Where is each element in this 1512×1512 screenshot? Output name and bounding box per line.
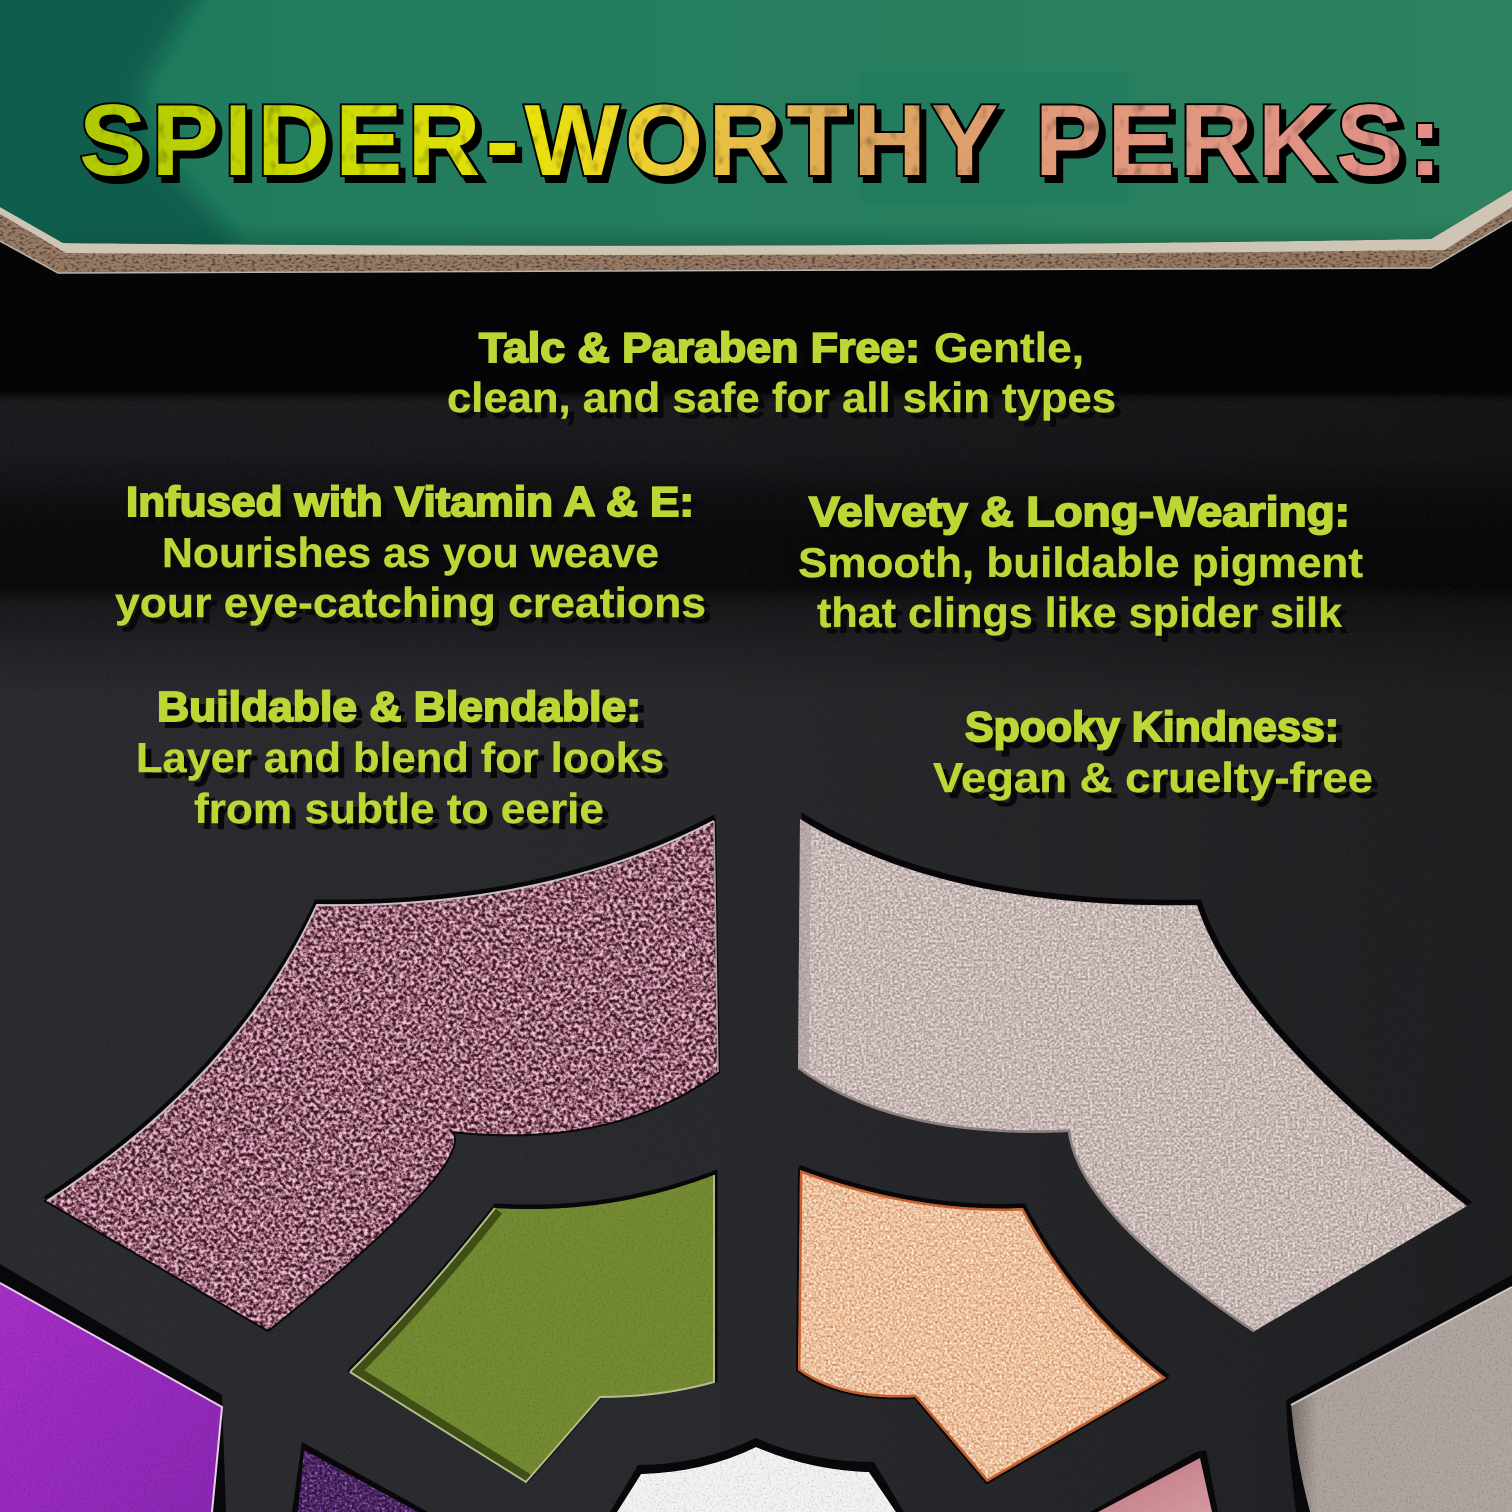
perk: velvety and long-wearing: Smooth, buildable pigment	[798, 539, 1363, 586]
eyeshadow pan: dark violet	[292, 1442, 428, 1512]
perk: vitamin A and E: your eye-catching creations	[115, 579, 706, 626]
panel: green lid	[0, 0, 1512, 270]
eyeshadow pan: olive matte	[350, 1173, 715, 1482]
perk: talc and paraben free	[447, 324, 1116, 421]
eyeshadow pan: purple	[0, 1264, 226, 1512]
perk: spooky kindness: Vegan & cruelty-free	[933, 754, 1373, 801]
eyeshadow pan: pink glitter	[46, 817, 718, 1330]
title: SPIDER-WORTHY PERKS:	[79, 85, 1447, 197]
perk: buildable and blendable: from subtle to eerie	[194, 785, 604, 832]
perk: velvety and long-wearing: that clings like spider silk	[817, 589, 1343, 636]
perk: talc and paraben free: clean, and safe for all skin types	[447, 374, 1116, 421]
lid edge: cream and cork board	[0, 190, 1512, 273]
eyeshadow pan: rose	[1090, 1450, 1218, 1512]
eyeshadow pan: peach shimmer	[798, 1167, 1167, 1482]
perk: vitamin A and E: Infused with Vitamin A & E:	[126, 478, 694, 525]
eyeshadow pan: silver shimmer	[798, 815, 1470, 1332]
eyeshadow pan: white	[610, 1438, 904, 1512]
perk: velvety and long-wearing: Velvety & Long-Wearing:	[809, 488, 1350, 535]
perk: talc and paraben free: Gentle,	[934, 324, 1084, 371]
perk: buildable and blendable: Layer and blend for looks	[136, 734, 664, 781]
perk: velvety and long-wearing	[798, 488, 1363, 636]
perk: vitamin A and E	[115, 478, 706, 626]
perk: buildable and blendable: Buildable & Blendable:	[157, 683, 641, 730]
eyeshadow pan: taupe matte	[1286, 1275, 1512, 1512]
perk: spooky kindness	[933, 703, 1373, 801]
perk: buildable and blendable	[136, 683, 664, 832]
perk: spooky kindness: Spooky Kindness:	[965, 703, 1339, 750]
perk: talc and paraben free: Talc & Paraben Free:	[479, 324, 920, 371]
perk: vitamin A and E: Nourishes as you weave	[162, 529, 659, 576]
